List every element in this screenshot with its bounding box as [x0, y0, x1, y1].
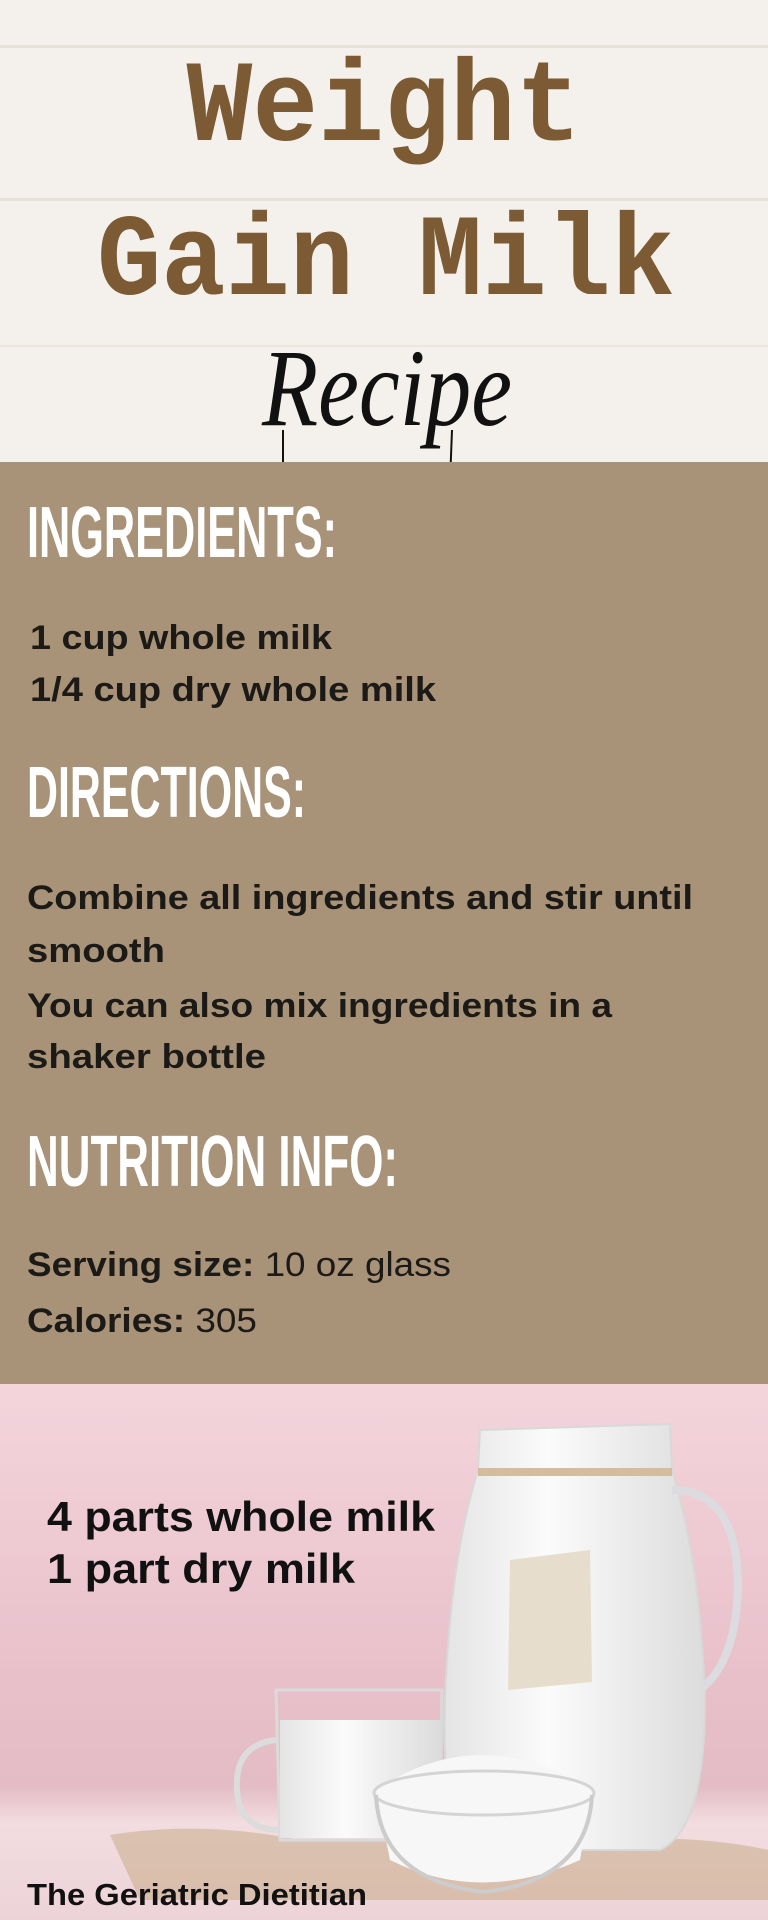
icon: glass of milk: [237, 1690, 442, 1840]
title: [97, 43, 675, 329]
ingredients list: 1/4 cup dry whole milk: [30, 671, 436, 709]
ingredients list: [30, 619, 436, 709]
directions text: [27, 879, 693, 1076]
icon: burlap cloth: [110, 1829, 768, 1900]
ingredients list: 1 cup whole milk: [30, 619, 332, 657]
directions text: Combine all ingredients and stir until: [27, 879, 693, 917]
directions text: shaker bottle: [27, 1038, 266, 1076]
heading: directions: DIRECTIONS:: [27, 753, 306, 833]
panel: photo: [0, 1384, 768, 1920]
nutrition text: Serving size: 10 oz glass: [27, 1246, 451, 1284]
directions text: smooth: [27, 932, 165, 970]
panel: recipe details: [0, 462, 768, 1384]
directions text: You can also mix ingredients in a: [27, 987, 613, 1025]
heading: nutrition info: NUTRITION INFO:: [27, 1122, 398, 1202]
heading: ingredients: INGREDIENTS:: [27, 493, 337, 573]
icon: pitcher: [444, 1424, 738, 1850]
title: Weight: [186, 43, 582, 175]
title: Gain Milk: [97, 197, 675, 329]
nutrition text: Calories: 305: [27, 1302, 257, 1340]
icon: bowl of dry milk: [374, 1755, 594, 1892]
footer: brand: The Geriatric Dietitian: [27, 1877, 367, 1912]
callout: ratio text: [47, 1493, 436, 1592]
callout: ratio text: 1 part dry milk: [47, 1545, 356, 1592]
callout: ratio text: 4 parts whole milk: [47, 1493, 436, 1540]
panel: wood header: [0, 0, 768, 462]
nutrition text: [27, 1246, 451, 1340]
subtitle: Recipe script: Recipe: [261, 327, 512, 449]
